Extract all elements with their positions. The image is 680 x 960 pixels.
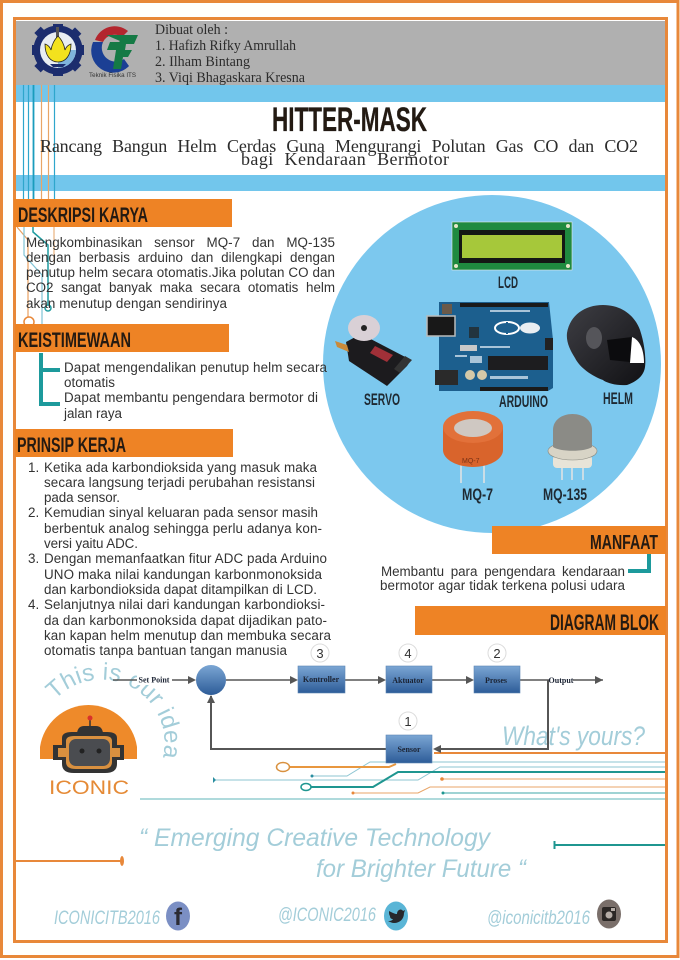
heading: Manfaat bbox=[492, 526, 666, 554]
quote bbox=[139, 824, 528, 883]
social: facebook: f bbox=[174, 904, 183, 931]
icon: helmet bbox=[567, 305, 645, 408]
text: working principle list: 2. bbox=[28, 505, 39, 520]
heading: Prinsip Kerja bbox=[15, 429, 233, 457]
block diagram: Output bbox=[549, 676, 574, 685]
block: Aktuator: Aktuator bbox=[392, 676, 424, 685]
arc text: This is our idea: This is our idea bbox=[44, 662, 180, 758]
icon: servo bbox=[335, 315, 412, 409]
text: working principle list: secara langsung terjadi perubahan resistansi bbox=[44, 475, 315, 490]
block diagram: 2 bbox=[493, 646, 501, 661]
icon: MQ-7 sensor: MQ-7 bbox=[462, 458, 480, 465]
quote: “ Emerging Creative Technology bbox=[139, 824, 491, 852]
icon: helmet: HELM bbox=[603, 389, 633, 408]
icon: Arduino: ARDUINO bbox=[499, 392, 548, 411]
logo: Teknik Fisika ITS: Teknik Fisika ITS bbox=[89, 72, 137, 79]
block diagram bbox=[113, 644, 603, 763]
panel: components circle bbox=[323, 195, 661, 533]
text: benefits: bermotor agar tidak terkena polusi udara bbox=[380, 578, 626, 593]
text: working principle list: berbentuk analog sehingga perlu adanya kon- bbox=[44, 521, 322, 536]
text: working principle list: kan kapan helm menutup dan membuka secara bbox=[44, 628, 332, 643]
circuit lines behind the left column bbox=[17, 85, 54, 327]
heading: Prinsip Kerja: PRINSIP KERJA bbox=[17, 434, 126, 457]
block: Kontroller: Kontroller bbox=[303, 675, 340, 684]
icon: LCD: LCD bbox=[498, 273, 518, 292]
text: description: Mengkombinasikan sensor MQ-7 dan MQ-135 bbox=[26, 235, 335, 250]
block diagram: 1 bbox=[404, 714, 412, 729]
icon: Arduino bbox=[427, 302, 553, 411]
authors: Dibuat oleh : bbox=[155, 22, 228, 38]
subtitle: bagi Kendaraan Bermotor bbox=[241, 149, 449, 169]
text: benefits bbox=[380, 564, 626, 593]
text: working principle list: Dengan memanfaatkan fitur ADC pada Arduino bbox=[44, 551, 327, 566]
logo: ICONIC robot: ICONIC bbox=[49, 778, 129, 799]
icon: MQ-135 sensor bbox=[543, 414, 597, 504]
circuit lines lower right bbox=[140, 753, 665, 799]
text: description bbox=[26, 235, 335, 311]
text: working principle list: UNO maka nilai kandungan karbonmonoksida bbox=[44, 567, 323, 582]
block: Sensor bbox=[386, 735, 432, 763]
social: instagram: @iconicitb2016 bbox=[487, 908, 590, 929]
bracket connector bbox=[41, 353, 60, 404]
heading: Keistimewaan bbox=[15, 324, 229, 352]
heading: Deskripsi Karya: DESKRIPSI KARYA bbox=[18, 204, 148, 227]
block: Kontroller bbox=[298, 666, 345, 693]
icon: LCD bbox=[452, 222, 572, 292]
authors: 2. Ilham Bintang bbox=[155, 54, 250, 70]
logo: ICONIC robot bbox=[40, 705, 137, 799]
text: working principle list: dan karbondioksida dapat ditampilkan di LCD. bbox=[44, 582, 317, 597]
bracket connector bbox=[628, 554, 649, 571]
text: features: Dapat mengendalikan penutup helm secara bbox=[64, 360, 328, 375]
icon: MQ-7 sensor: MQ-7 bbox=[462, 485, 493, 504]
authors: 1. Hafizh Rifky Amrullah bbox=[155, 38, 297, 54]
icon: servo: SERVO bbox=[364, 390, 400, 409]
heading: Diagram Blok bbox=[415, 606, 666, 635]
text: description: dengan berbasis arduino dan dilengkapi dengan bbox=[26, 250, 335, 265]
block: Sensor: Sensor bbox=[397, 745, 421, 754]
accent line right bbox=[554, 841, 665, 849]
text: working principle list: 1. bbox=[28, 460, 39, 475]
accent line left bbox=[16, 856, 124, 866]
text: features: Dapat membantu pengendara bermotor di bbox=[64, 390, 318, 405]
block diagram: 3 bbox=[316, 646, 324, 661]
logo: Teknik Fisika ITS bbox=[89, 26, 138, 79]
text: features: jalan raya bbox=[63, 406, 123, 421]
social: instagram bbox=[487, 900, 621, 929]
text: features: otomatis bbox=[64, 375, 115, 390]
text: description: akan menutup dengan sendirinya bbox=[26, 296, 228, 311]
text: working principle list: Selanjutnya nilai dari kandungan karbondioksi- bbox=[44, 597, 325, 612]
social: facebook: ICONICITB2016 bbox=[54, 908, 160, 929]
text: working principle list bbox=[28, 460, 332, 658]
block diagram: Set Point bbox=[139, 676, 170, 684]
header band with logos and authors bbox=[16, 21, 665, 86]
authors bbox=[155, 22, 306, 86]
icon: MQ-135 sensor: MQ-135 bbox=[543, 485, 587, 504]
text: benefits: Membantu para pengendara kendaraan bbox=[381, 564, 625, 579]
text: features bbox=[63, 360, 328, 421]
text: working principle list: pada sensor. bbox=[44, 490, 120, 505]
text: working principle list: otomatis tanpa bantuan tangan manusia bbox=[44, 643, 288, 658]
subtitle: Rancang Bangun Helm Cerdas Guna Mengurangi Polutan Gas CO dan CO2 bbox=[40, 136, 638, 156]
text: working principle list: versi yaitu ADC. bbox=[44, 536, 138, 551]
quote: for Brighter Future “ bbox=[316, 855, 528, 883]
heading: Keistimewaan: KEISTIMEWAAN bbox=[18, 329, 131, 352]
text: What's yours: What's yours? bbox=[502, 721, 645, 751]
text: working principle list: Ketika ada karbondioksida yang masuk maka bbox=[44, 460, 318, 475]
text: working principle list: 4. bbox=[28, 597, 39, 612]
block diagram: 4 bbox=[404, 646, 412, 661]
text: description: penutup helm secara otomatis.Jika polutan CO dan bbox=[26, 265, 335, 280]
logo: ITS gear bbox=[32, 24, 84, 76]
block: Aktuator bbox=[386, 666, 432, 693]
text: description: CO2 sangat banyak maka secara otomatis helm bbox=[26, 280, 335, 295]
icon: MQ-7 sensor bbox=[443, 411, 503, 504]
social: twitter: @ICONIC2016 bbox=[278, 905, 376, 926]
number badges bbox=[311, 644, 506, 730]
text: working principle list: da dan karbonmonoksida dapat dijadikan pato- bbox=[44, 613, 327, 628]
text: working principle list: 3. bbox=[28, 551, 39, 566]
authors: 3. Viqi Bhagaskara Kresna bbox=[155, 70, 306, 86]
block: Proses: Proses bbox=[485, 676, 507, 685]
title: HITTER-MASK bbox=[272, 101, 427, 139]
text: working principle list: Kemudian sinyal keluaran pada sensor masih bbox=[44, 505, 318, 520]
block: Proses bbox=[474, 666, 520, 693]
subtitle bbox=[40, 136, 638, 169]
